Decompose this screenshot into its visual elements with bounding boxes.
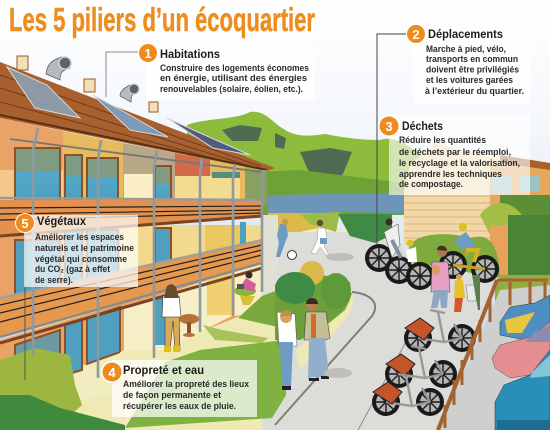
callout 4: Propreté et eau	[101, 360, 257, 417]
callout 3: Déchets: Réduire les quantités	[399, 135, 486, 145]
bike area line	[358, 338, 408, 430]
callout 4: Propreté et eau: Propreté et eau	[123, 363, 204, 377]
leader line pillar 1	[106, 52, 140, 97]
ground: path	[0, 230, 390, 430]
cyclists	[365, 218, 499, 290]
building middle floor wall	[0, 222, 262, 320]
callout 5: Végétaux	[15, 213, 138, 287]
callout 3: Déchets: apprendre les techniques	[399, 169, 502, 179]
callout 4: Propreté et eau: de façon permanente et	[123, 390, 221, 400]
callout 1: Habitations: Habitations	[160, 47, 220, 61]
callout 5: Végétaux: de serre).	[35, 275, 73, 285]
patio	[72, 316, 280, 430]
poles	[33, 128, 263, 378]
trees and lawn on the right	[400, 195, 550, 310]
two men talking	[277, 298, 352, 390]
leader line pillar 2	[377, 34, 408, 245]
callout 1: Habitations: Construire des logements économes	[160, 63, 309, 73]
green lawn front	[125, 340, 286, 428]
road	[262, 232, 500, 430]
callout 3: Déchets: le recyclage et la valorisation,	[399, 158, 520, 168]
person at table with laptop	[234, 272, 256, 305]
callout 2: Déplacements: Déplacements	[428, 27, 503, 41]
callout 2: Déplacements: doivent être privilégiés	[426, 64, 519, 74]
callout 2: Déplacements: Marche à pied, vélo,	[426, 44, 506, 54]
callout 2: Déplacements: et les voitures garées	[426, 75, 513, 85]
building upper floor wall	[0, 118, 267, 210]
parked rental bikes	[372, 310, 476, 416]
callout 5: Végétaux: naturels et le patrimoine	[35, 243, 134, 253]
callout 4: Propreté et eau: 4	[108, 365, 116, 380]
parked cars	[492, 295, 550, 430]
wooden railing	[438, 280, 548, 430]
callout 1: Habitations	[138, 43, 314, 100]
callout 3: Déchets: de déchets par le réemploi,	[399, 147, 511, 157]
person standing on patio	[162, 284, 181, 352]
leader line pillar 5	[24, 232, 26, 380]
callout 2: Déplacements: à l’extérieur du quartier.	[425, 86, 524, 96]
callout 2: Déplacements	[406, 24, 530, 104]
callout 2: Déplacements: transports en commun	[426, 54, 518, 64]
callout 1: Habitations: renouvelables (solaire, éolien, etc.).	[160, 84, 303, 94]
solar panels	[7, 67, 250, 155]
children playing football	[276, 219, 354, 261]
woman and child	[431, 246, 480, 312]
lower balcony	[0, 240, 262, 343]
sidewalk near cars	[440, 285, 550, 430]
round table	[179, 314, 199, 337]
callout 5: Végétaux: 5	[21, 216, 29, 231]
callout 3: Déchets	[378, 114, 530, 195]
roof vents	[17, 56, 158, 112]
callout 3: Déchets: de compostage.	[399, 179, 463, 189]
title: Les 5 piliers d’un écoquartier	[9, 1, 315, 38]
upper lawn patches	[203, 290, 352, 343]
callout 2: Déplacements: 2	[412, 27, 420, 42]
bush lower left	[0, 348, 125, 430]
kerb	[275, 292, 375, 425]
tree cluster centre	[275, 261, 353, 370]
upper balcony	[0, 198, 262, 236]
lake	[268, 193, 410, 218]
callout 3: Déchets: Déchets	[402, 119, 443, 133]
background trees	[187, 112, 425, 215]
callout 1: Habitations: en énergie, utilisant des énergies	[160, 73, 307, 83]
roof	[0, 62, 275, 171]
bushes behind the children	[262, 212, 392, 292]
callout 5: Végétaux: végétal qui consomme	[35, 254, 127, 264]
callout 5: Végétaux: Améliorer les espaces	[35, 232, 124, 242]
callout 3: Déchets: 3	[385, 119, 393, 134]
callout 4: Propreté et eau: Améliorer la propreté des lieux	[123, 379, 250, 389]
callout 5: Végétaux: du CO₂ (gaz à effet	[35, 264, 110, 274]
building ground floor	[0, 262, 262, 392]
callout 4: Propreté et eau: récupérer les eaux de pluie.	[123, 401, 236, 411]
callout 5: Végétaux: Végétaux	[37, 214, 86, 228]
callout 1: Habitations: 1	[144, 46, 152, 61]
house in background	[404, 143, 550, 245]
